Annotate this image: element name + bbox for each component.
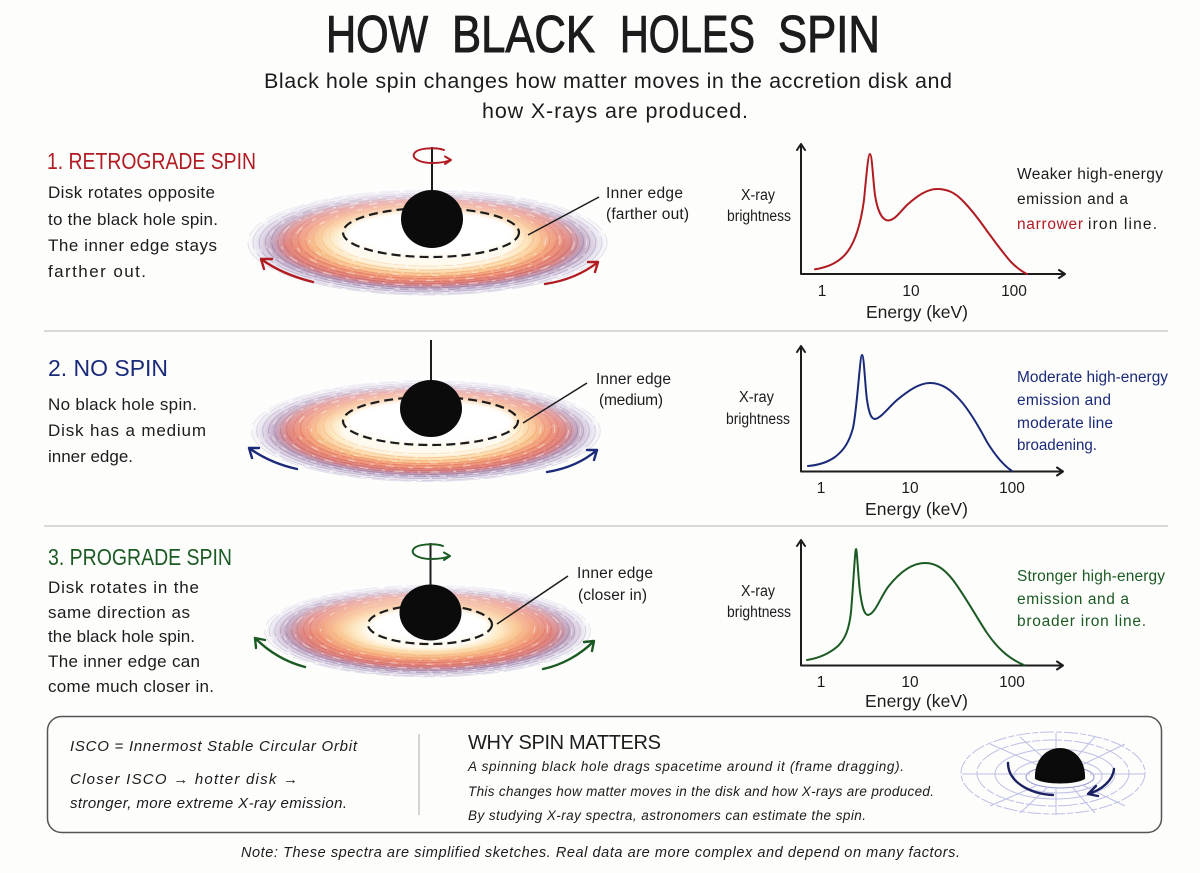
- text block: retrograde result: [1017, 166, 1163, 233]
- x axis label: Energy (keV): [865, 499, 968, 519]
- arrow: disk rotation right: [547, 450, 597, 472]
- chart: retrograde spectrum: [727, 144, 1065, 322]
- text block: prograde description: [48, 578, 214, 696]
- text block: retrograde result: emission and a: [1017, 191, 1128, 208]
- title: [326, 6, 880, 64]
- y axis label: brightness: [727, 604, 791, 621]
- text block: ISCO definition: ISCO = Innermost Stable Circular Orbit: [70, 738, 358, 755]
- note: Note: These spectra are simplified sketches. Real data are more complex and depend on many factors.: [241, 845, 960, 861]
- y axis label: [727, 187, 791, 225]
- callout: inner edge: Inner edge: [577, 565, 653, 582]
- arrow: disk rotation left: [249, 448, 297, 469]
- text block: why spin matters: By studying X-ray spectra, astronomers can estimate the spin.: [468, 808, 866, 823]
- x axis label: Energy (keV): [865, 691, 968, 711]
- text block: no spin description: No black hole spin.: [48, 395, 197, 414]
- axis tick labels: 10: [902, 283, 920, 300]
- text block: prograde result: emission and a: [1017, 591, 1129, 608]
- title: HOLES: [620, 6, 755, 64]
- panel: prograde spin: [48, 540, 1165, 711]
- y axis label: X-ray: [741, 187, 775, 204]
- text block: prograde description: the black hole spin.: [48, 627, 195, 646]
- y axis label: [726, 389, 790, 428]
- text block: no spin description: inner edge.: [48, 447, 133, 466]
- text block: prograde description: Disk rotates in the: [48, 578, 199, 597]
- text block: prograde result: [1017, 568, 1165, 630]
- axis tick labels: 10: [901, 674, 919, 691]
- text block: why spin matters: [467, 759, 934, 823]
- panel: no spin: [48, 340, 1168, 519]
- accretion disk diagram: no spin: [246, 340, 671, 484]
- text block: retrograde description: [48, 183, 218, 281]
- y axis label: [727, 583, 791, 621]
- text block: retrograde description: farther out.: [48, 262, 146, 281]
- axis tick labels: 1: [817, 674, 825, 691]
- text block: ISCO definition: Closer ISCO → hotter disk →: [70, 771, 298, 788]
- y axis label: brightness: [726, 411, 790, 428]
- text block: retrograde description: to the black hole spin.: [48, 210, 218, 229]
- chart: prograde spectrum: [727, 540, 1063, 711]
- axis tick labels: 100: [1001, 283, 1027, 300]
- heading: no spin: 2. NO SPIN: [48, 355, 168, 381]
- axis tick labels: 100: [999, 674, 1025, 691]
- icon: spin direction: [414, 148, 451, 164]
- y axis label: brightness: [727, 208, 791, 225]
- axis tick labels: 1: [818, 283, 826, 300]
- y axis label: X-ray: [739, 389, 774, 406]
- callout: inner edge: Inner edge: [596, 371, 671, 388]
- text block: why spin matters: A spinning black hole drags spacetime around it (frame dragging).: [467, 759, 904, 774]
- axis tick labels: [818, 283, 1027, 300]
- axis tick labels: 10: [901, 480, 919, 497]
- text block: retrograde result: Weaker high-energy: [1017, 166, 1163, 183]
- text block: no spin result: broadening.: [1017, 437, 1097, 454]
- accretion disk diagram: retrograde: [242, 147, 689, 298]
- y axis label: X-ray: [741, 583, 775, 600]
- arrow: disk rotation left: [255, 638, 305, 667]
- subtitle: how X-rays are produced.: [482, 99, 748, 123]
- arrow: disk rotation right: [545, 262, 598, 284]
- chart: no spin spectrum: [726, 346, 1063, 519]
- callout: inner edge: [528, 185, 689, 235]
- title: HOW: [326, 6, 428, 64]
- title: BLACK: [452, 6, 595, 64]
- text block: retrograde description: Disk rotates opposite: [48, 183, 215, 202]
- text block: no spin result: Moderate high-energy: [1017, 369, 1168, 386]
- text block: prograde description: The inner edge can: [48, 652, 200, 671]
- text block: retrograde result: narrower: [1017, 216, 1083, 233]
- heading: why spin matters: WHY SPIN MATTERS: [468, 732, 661, 754]
- panel: retrograde spin: [47, 144, 1163, 322]
- text block: prograde result: Stronger high-energy: [1017, 568, 1165, 585]
- text block: why spin matters: This changes how matter moves in the disk and how X-rays are produced.: [468, 784, 934, 799]
- text block: no spin result: moderate line: [1017, 415, 1113, 432]
- accretion disk diagram: prograde: [255, 543, 653, 679]
- axis tick labels: 100: [999, 480, 1025, 497]
- text block: prograde description: same direction as: [48, 603, 190, 622]
- icon: spin direction: [413, 544, 450, 560]
- axis tick labels: 1: [817, 480, 825, 497]
- x axis label: Energy (keV): [866, 302, 968, 322]
- text block: ISCO definition: [70, 738, 358, 812]
- text block: retrograde result: iron line.: [1088, 216, 1157, 233]
- callout: inner edge: [523, 371, 671, 423]
- arrow: disk rotation left: [261, 259, 313, 282]
- text block: no spin result: [1017, 369, 1168, 454]
- subtitle: Black hole spin changes how matter moves in the accretion disk and: [264, 69, 952, 93]
- heading: prograde: 3. PROGRADE SPIN: [48, 544, 232, 570]
- callout: inner edge: (closer in): [578, 587, 647, 604]
- panel: ISCO and why spin matters: [48, 716, 1162, 832]
- title: SPIN: [778, 6, 880, 64]
- text block: no spin description: Disk has a medium: [48, 421, 206, 440]
- text block: prograde result: broader iron line.: [1017, 613, 1146, 630]
- arrow: disk rotation right: [543, 641, 594, 669]
- subtitle: [264, 69, 952, 123]
- icon: frame dragging spacetime: [961, 732, 1145, 815]
- callout: inner edge: [497, 565, 653, 624]
- callout: inner edge: Inner edge: [606, 185, 683, 202]
- text block: ISCO definition: stronger, more extreme X-ray emission.: [70, 795, 347, 812]
- callout: inner edge: (medium): [599, 392, 663, 409]
- text block: prograde description: come much closer in.: [48, 677, 214, 696]
- axis tick labels: [817, 480, 1025, 497]
- text block: retrograde description: The inner edge stays: [48, 236, 217, 255]
- heading: retrograde: 1. RETROGRADE SPIN: [47, 148, 256, 174]
- text block: no spin result: emission and: [1017, 392, 1111, 409]
- text block: no spin description: [48, 395, 206, 466]
- callout: inner edge: (farther out): [606, 206, 689, 223]
- axis tick labels: [817, 674, 1025, 691]
